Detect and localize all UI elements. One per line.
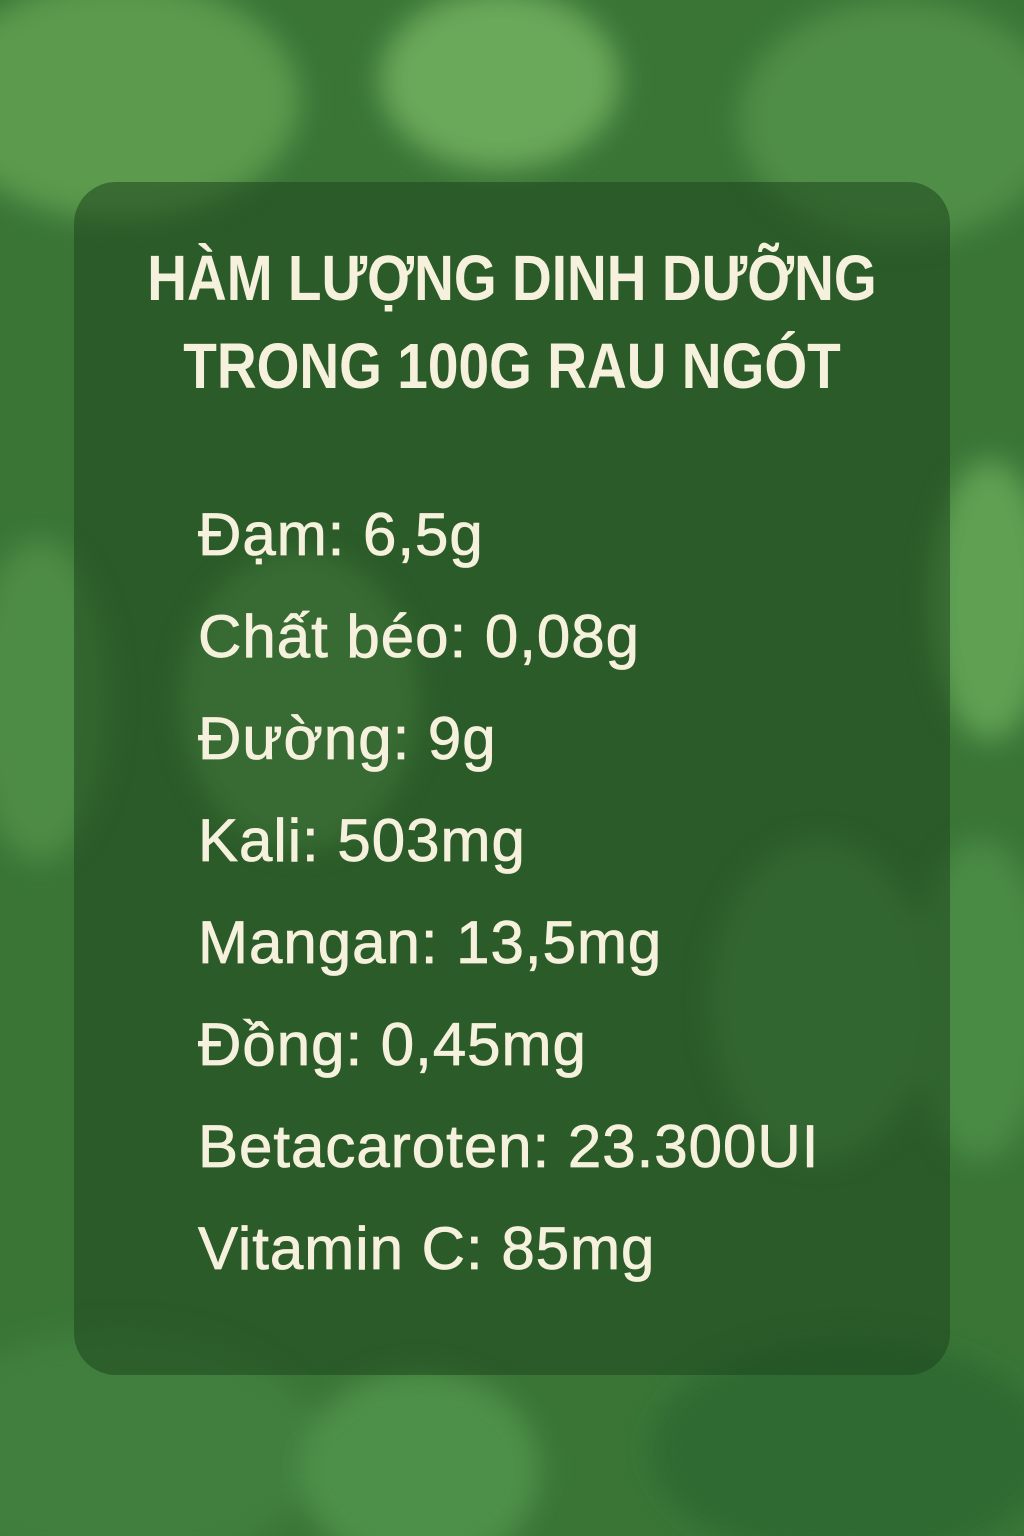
- title: HÀM LƯỢNG DINH DƯỠNG: [147, 242, 877, 314]
- nutrient list: Kali: 503mg: [198, 807, 526, 874]
- title: [147, 242, 877, 402]
- nutrient list: Betacaroten: 23.300UI: [198, 1113, 819, 1180]
- nutrient list: Đồng: 0,45mg: [198, 1011, 587, 1078]
- nutrient list: Chất béo: 0,08g: [198, 603, 640, 670]
- title: TRONG 100G RAU NGÓT: [183, 330, 841, 402]
- nutrient list: Đạm: 6,5g: [198, 501, 484, 568]
- nutrient list: Vitamin C: 85mg: [198, 1215, 655, 1282]
- panel: nutrition card: [74, 182, 950, 1375]
- nutrient list: Đường: 9g: [198, 705, 497, 772]
- nutrient list: Mangan: 13,5mg: [198, 909, 662, 976]
- nutrient list: [198, 501, 819, 1282]
